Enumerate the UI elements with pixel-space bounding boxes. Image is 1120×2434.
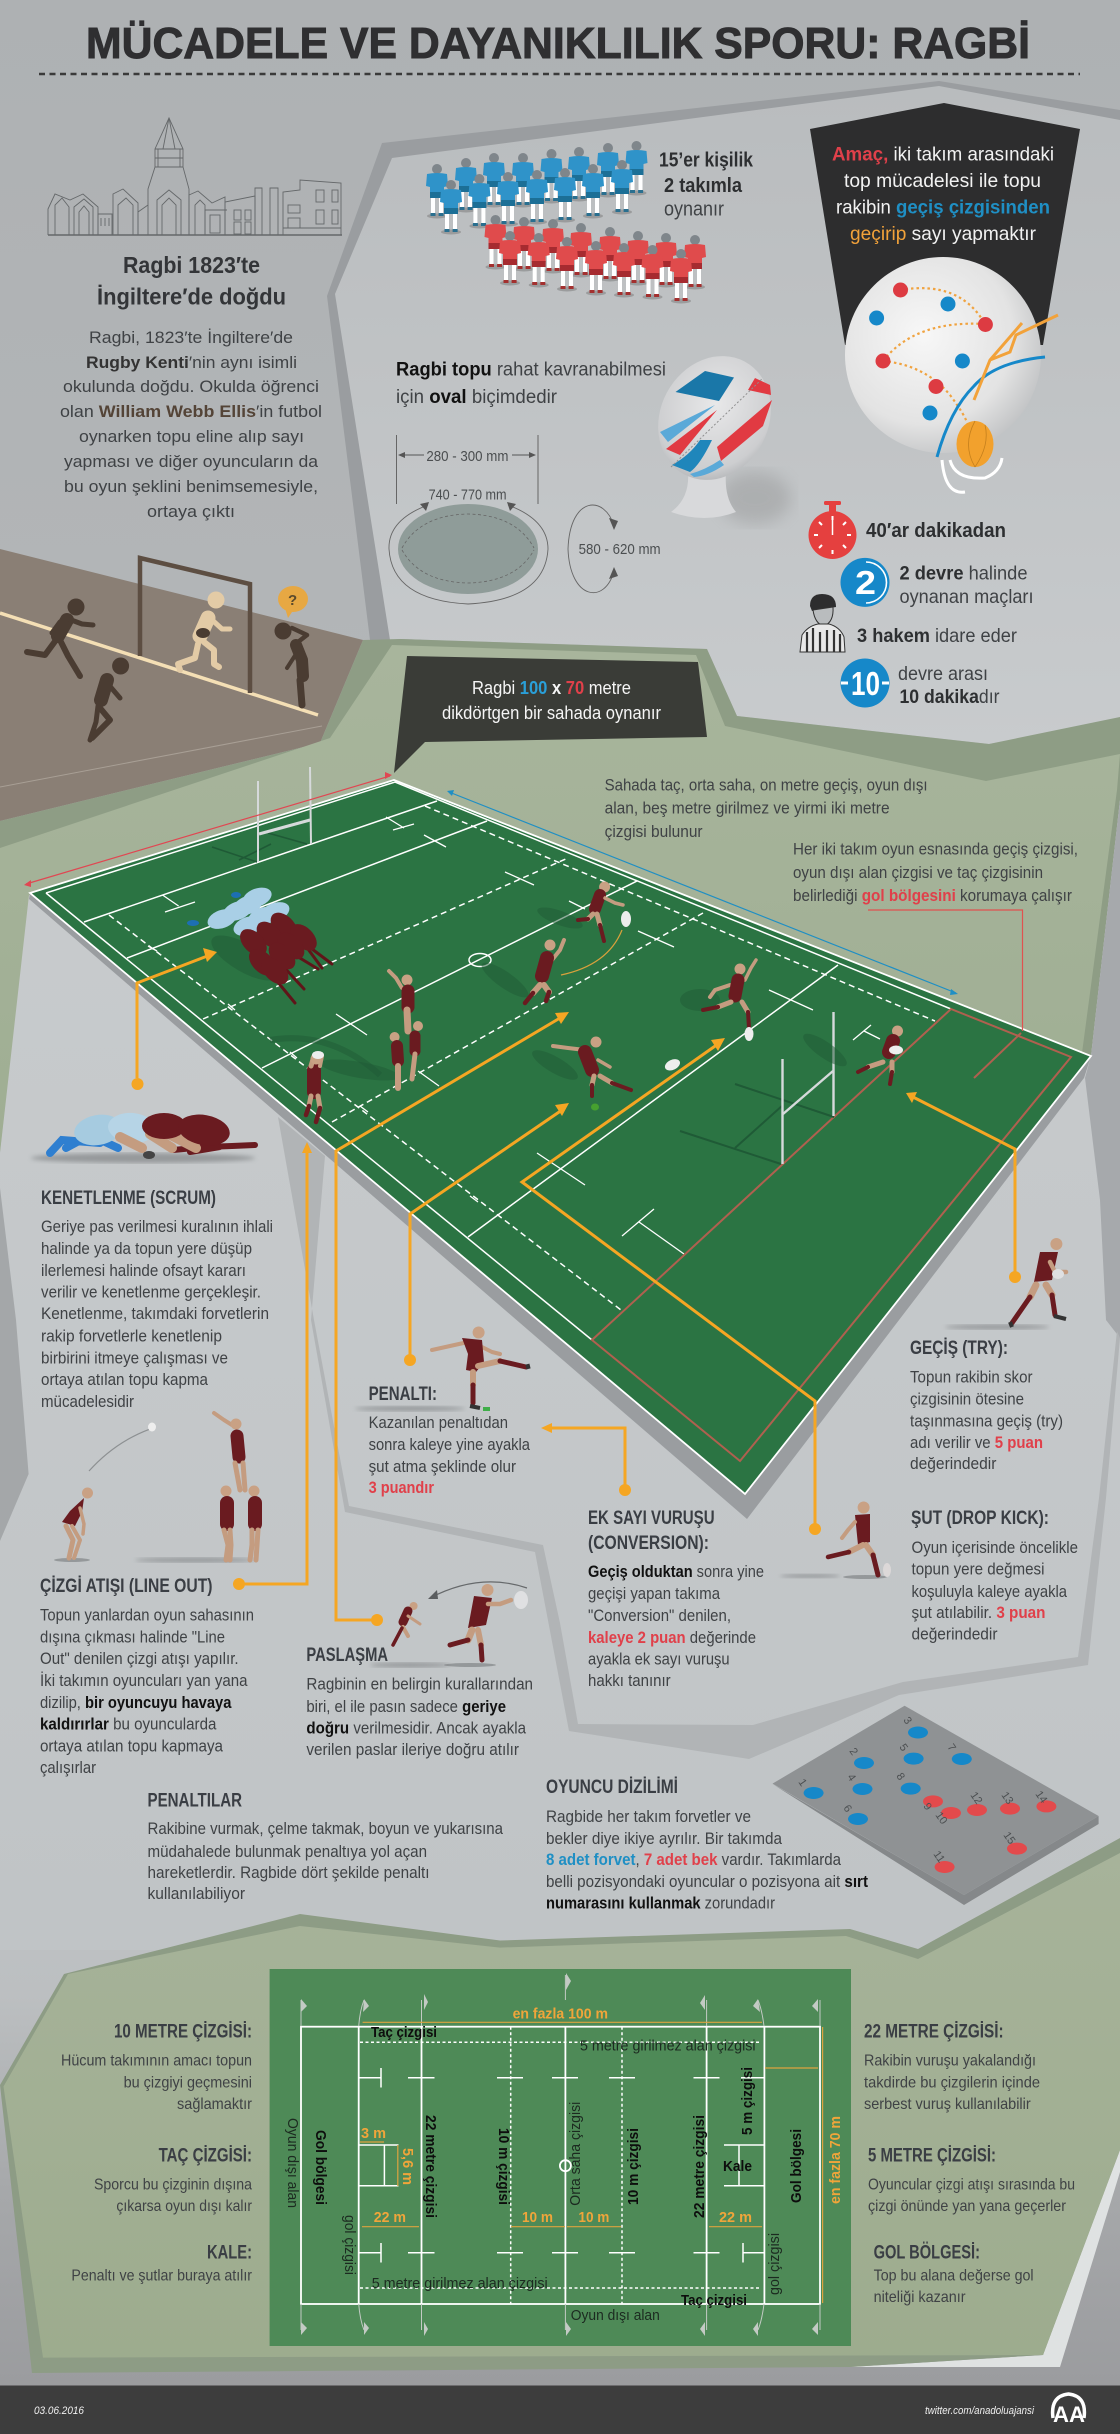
label: 5 metre line: çizgi önünde yan yana geçerler	[868, 2198, 1067, 2215]
panel: lower green pitch guide	[0, 1838, 1120, 2373]
text: pitch lines note: Sahada taç, orta saha, on metre geçiş, oyun dışı	[605, 776, 928, 794]
text: scrum: rakip forvetlerle kenetlenip	[41, 1327, 222, 1345]
text: aim	[832, 144, 1054, 245]
label: 10 metre line: 10 METRE ÇİZGİSİ:	[114, 2022, 252, 2043]
arrow: scrum pointer	[132, 948, 217, 1090]
text: rugby ball description	[396, 360, 666, 408]
panel: brown history ground	[0, 549, 363, 821]
pitch line labels: 5 metre girilmez alan çizgisi	[580, 2038, 756, 2055]
text: line out: kaldırırlar bu oyuncularda	[40, 1716, 217, 1734]
diagram: player formation board: 12	[968, 1790, 984, 1807]
heading: drop kick: ŞUT (DROP KICK):	[911, 1508, 1049, 1529]
pitch line labels: Oyun dışı alan	[284, 2118, 301, 2208]
text: 15 player teams	[659, 150, 754, 220]
text: line out: Out" denilen çizgi atışı yapılır.	[40, 1650, 239, 1668]
pitch orange measurements: 10 m	[578, 2209, 609, 2226]
diagram: top-down pitch	[270, 1969, 851, 2346]
text: passing: doğru verilmesidir. Ancak ayakla	[306, 1720, 527, 1738]
arrow: drop kick pointer	[522, 1038, 821, 1535]
text: goal area note: Her iki takım oyun esnasında geçiş çizgisi,	[793, 841, 1078, 859]
pitch line labels: 22 metre çizgisi	[691, 2115, 708, 2218]
diagram: player formation board: 15	[1001, 1830, 1017, 1847]
text: try: değerindedir	[910, 1455, 997, 1473]
label: 22 metre line: serbest vuruş kullanılabilir	[864, 2096, 1031, 2113]
label: 5 metre line: Oyuncular çizgi atışı sırasında bu	[868, 2176, 1075, 2194]
heading: try: GEÇİŞ (TRY):	[910, 1338, 1008, 1359]
red pointer to goal area	[868, 910, 1022, 1031]
pitch line labels: gol çizgisi	[341, 2215, 358, 2275]
illustration: penalty kicker	[355, 1326, 530, 1411]
text: passing: biri, el ile pasın sadece geriye	[306, 1698, 506, 1716]
diagram: player formation board: 1	[796, 1777, 809, 1789]
icon: running figure one	[27, 598, 93, 676]
diagram: ball dimensions: 280 - 300 mm	[426, 448, 508, 465]
icon: rugby ball on tee	[637, 336, 792, 524]
text: penalties: müdahalede bulunmak penaltıya yol açan	[148, 1843, 427, 1861]
diagram: attack play on ball	[845, 257, 1058, 492]
text: aim: Amaç, iki takım arasındaki	[832, 144, 1054, 166]
text: drop kick: koşuluyla kaleye ayakla	[912, 1583, 1068, 1601]
text: player formation	[546, 1808, 868, 1912]
heading: penalties: PENALTILAR	[148, 1790, 242, 1811]
label: touch line	[94, 2146, 253, 2215]
text: conversion: hakkı tanınır	[588, 1672, 671, 1690]
text: penalty: sonra kaleye yine ayakla	[369, 1436, 531, 1454]
arrow: try pointer	[906, 1092, 1021, 1283]
goal line and dead ball area	[592, 1009, 1071, 1461]
arrow: passing pointer	[336, 1012, 569, 1626]
heading: player formation: OYUNCU DİZİLİMİ	[546, 1777, 678, 1798]
text: penalties	[148, 1820, 504, 1903]
text: conversion: "Conversion" denilen,	[588, 1607, 731, 1625]
icon: confused figure	[274, 622, 307, 705]
text: player formation: numarasını kullanmak zorundadır	[546, 1894, 775, 1912]
icon: running figure two	[90, 658, 129, 740]
text: penalty: şut atma şeklinde olur	[369, 1458, 516, 1476]
diagram: ball dimensions: 580 - 620 mm	[579, 541, 661, 558]
player: place kicker on pitch	[680, 960, 756, 1041]
panel: aim black box	[810, 103, 1080, 345]
text: pitch lines note: alan, beş metre girilmez ve yirmi iki metre	[605, 800, 890, 818]
text: penalties: kullanılabiliyor	[148, 1885, 245, 1903]
pitch orange measurements: en fazla 100 m	[513, 2005, 608, 2022]
diagram: player formation board: 14	[1033, 1789, 1049, 1806]
diagram: player formation board	[772, 1706, 1099, 1905]
label: 22 metre line: Rakibin vuruşu yakalandığı	[864, 2053, 1036, 2070]
history: heading: İngiltere′de doğdu	[97, 284, 286, 310]
heading: penalty: PENALTI:	[369, 1384, 437, 1405]
footer bar	[0, 2386, 1120, 2434]
diagram: player formation board: 6	[841, 1803, 854, 1815]
text: passing: verilen paslar ileriye doğru atılır	[306, 1741, 519, 1759]
label: 10 metre line: Hücum takımının amacı topun	[61, 2053, 252, 2070]
pitch orange measurements: 5,6 m	[399, 2148, 416, 2185]
text: half time: 10 dakikadır	[900, 686, 1000, 708]
text: scrum: halinde ya da topun yere düşüp	[41, 1240, 252, 1258]
pitch line labels: Taç çizgisi	[371, 2024, 437, 2041]
pitch orange measurements: 10 m	[522, 2209, 553, 2226]
team: red 15 players	[484, 215, 706, 304]
pitch line labels	[284, 2024, 805, 2324]
history: body text: yapması ve diğer oyuncuların da	[64, 453, 319, 471]
text: try: adı verilir ve 5 puan	[910, 1434, 1043, 1452]
goal posts far	[212, 767, 311, 862]
text: line out: Topun yanlardan oyun sahasının	[40, 1607, 254, 1625]
panel: green field surround	[0, 639, 1120, 1153]
pitch length arrow	[447, 790, 958, 995]
text: penalties: hareketlerdir. Ragbide dört şekilde penaltı	[148, 1864, 430, 1882]
footer bar: twitter.com/anadoluajansi	[925, 2405, 1034, 2417]
label: 5 metre line: 5 METRE ÇİZGİSİ:	[868, 2146, 996, 2167]
text: line out	[40, 1607, 254, 1777]
label: 22 metre line: takdirde bu çizgilerin içinde	[864, 2075, 1040, 2092]
pitch line labels: 10 m çizgisi	[495, 2128, 512, 2205]
icon: William Webb Ellis figure	[178, 592, 230, 670]
label: 10 metre line	[61, 2022, 253, 2113]
text: drop kick: değerindedir	[912, 1626, 998, 1644]
diagram: ball dimensions	[389, 435, 661, 604]
player: try scorer on pitch	[799, 1026, 903, 1084]
text: player formation: bekler diye ikiye ayrılır. Bir takımda	[546, 1830, 783, 1848]
icon: agency logo: AA	[1053, 2402, 1085, 2427]
label: touch line: Sporcu bu çizginin dışına	[94, 2176, 252, 2194]
text: half time: devre arası	[898, 663, 988, 685]
history: body text: ortaya çıktı	[147, 503, 235, 521]
panel: lower grey rules area	[0, 800, 1120, 1950]
label: goal posts: KALE:	[207, 2243, 252, 2264]
text: scrum: Kenetlenme, takımdaki forvetlerin	[41, 1305, 269, 1323]
text: conversion: Geçiş olduktan sonra yine	[588, 1563, 764, 1581]
text: penalty	[369, 1414, 531, 1497]
text: goal area note	[793, 841, 1078, 905]
history: body text: Ragbi, 1823′te İngiltere′de	[89, 328, 293, 347]
title: MÜCADELE VE DAYANIKLILIK SPORU: RAGBİ	[86, 19, 1030, 68]
text: line out: dışına çıkması halinde "Line	[40, 1628, 225, 1646]
arrow: conversion pointer	[541, 1423, 631, 1496]
label: goal posts	[71, 2243, 253, 2284]
label: touch line: TAÇ ÇİZGİSİ:	[159, 2146, 252, 2167]
illustration: passing	[370, 1582, 528, 1668]
pitch line labels: gol çizgisi	[766, 2233, 783, 2295]
icon: question bubble: ?	[288, 592, 297, 609]
callout: pitch size	[394, 656, 707, 773]
text: two halves	[900, 563, 1034, 608]
text: try: taşınmasına geçiş (try)	[910, 1412, 1063, 1430]
pitch line labels: Gol bölgesi	[312, 2130, 329, 2205]
player: scrum on pitch	[187, 884, 332, 1003]
label: 5 metre line	[868, 2146, 1075, 2215]
illustration: drop kick	[780, 1502, 891, 1579]
player: passer on pitch	[477, 940, 564, 1003]
label: 22 metre line: 22 METRE ÇİZGİSİ:	[864, 2022, 1004, 2043]
illustration: try scorer	[945, 1238, 1066, 1330]
pitch line labels: Gol bölgesi	[788, 2129, 805, 2203]
text: passing: Ragbinin en belirgin kurallarından	[306, 1676, 533, 1694]
text: try	[910, 1368, 1063, 1473]
text: line out: dizilip, bir oyuncuyu havaya	[40, 1694, 232, 1712]
text: drop kick	[912, 1539, 1078, 1644]
pitch line labels: Oyun dışı alan	[571, 2307, 660, 2324]
icon: two halves	[840, 558, 890, 607]
pitch line labels: 5 metre girilmez alan çizgisi	[372, 2275, 548, 2292]
diagram: player formation board: 2	[847, 1746, 860, 1758]
diagram: player formation board: 13	[999, 1790, 1015, 1807]
label: touch line: çıkarsa oyun dışı kalır	[116, 2198, 253, 2215]
text: try: çizgisinin ötesine	[910, 1391, 1024, 1409]
text: aim: top mücadelesi ile topu	[844, 170, 1041, 192]
icon: ten minutes	[840, 658, 890, 708]
text: half time	[898, 663, 1000, 708]
callout: pitch size: dikdörtgen bir sahada oynanır	[442, 702, 661, 723]
illustration: line out	[54, 1413, 260, 1562]
text: line out: İki takımın oyuncuları yan yana	[40, 1671, 248, 1690]
diagram: ball dimensions: 740 - 770 mm	[429, 487, 507, 504]
text: conversion: geçişi yapan takıma	[588, 1585, 721, 1603]
text: scrum: verilir ve kenetlenme gerçekleşir.	[41, 1284, 261, 1302]
panel: upper right	[327, 81, 1120, 744]
history: body text: olan William Webb Ellis ′in futbol	[60, 403, 322, 421]
text: 40 minutes: 40′ar dakikadan	[866, 520, 1006, 542]
icon: question bubble	[278, 586, 308, 618]
icon: referee	[800, 594, 845, 652]
diagram: player formation board: 11	[931, 1849, 947, 1865]
text: drop kick: Oyun içerisinde öncelikle	[912, 1539, 1078, 1557]
diagram: player formation board: 9	[921, 1801, 934, 1813]
label: 10 metre line: sağlamaktır	[177, 2096, 253, 2113]
label: goal zone: niteliği kazanır	[874, 2289, 966, 2306]
heading: conversion: (CONVERSION):	[588, 1533, 709, 1554]
pitch orange measurements: 22 m	[374, 2209, 406, 2226]
player: lineout thrower	[306, 1051, 401, 1122]
text: scrum: ortaya atılan topu kapma	[41, 1371, 209, 1389]
text: penalties: Rakibine vurmak, çelme takmak, boyun ve yukarısına	[148, 1820, 504, 1838]
heading: passing: PASLAŞMA	[306, 1645, 388, 1666]
diagram: player formation board: 7	[945, 1742, 958, 1754]
pitch line labels: 5 m çizgisi	[739, 2067, 756, 2135]
label: goal zone: Top bu alana değerse gol	[874, 2267, 1034, 2284]
text: penalty: Kazanılan penaltıdan	[369, 1414, 508, 1432]
text: drop kick: şut atılabilir. 3 puan	[912, 1604, 1046, 1622]
pitch line labels: Orta saha çizgisi	[567, 2102, 584, 2206]
text: scrum: mücadelesidir	[41, 1393, 134, 1411]
arrow: penalty pointer	[404, 1103, 569, 1366]
player: passer top with ball	[535, 882, 631, 975]
diagram: player formation board: 4	[845, 1772, 858, 1784]
goal posts near	[680, 1012, 834, 1164]
diagram: player formation board: 3	[901, 1715, 914, 1727]
text: three referees: 3 hakem idare eder	[857, 625, 1017, 647]
text: conversion: ayakla ek sayı vuruşu	[588, 1651, 730, 1669]
history: building line art	[48, 118, 342, 235]
footer bar: 03.06.2016	[34, 2405, 85, 2417]
text: line out: ortaya atılan topu kapmaya	[40, 1737, 224, 1755]
pitch orange measurements: en fazla 70 m	[827, 2116, 844, 2204]
rugby pitch in perspective	[24, 767, 1091, 1519]
pitch line labels: 22 metre çizgisi	[422, 2115, 439, 2218]
history: body text: oynarken topu eline alıp sayı	[79, 428, 304, 446]
text: two halves: 2 devre halinde	[900, 563, 1028, 585]
player: drop kicker on pitch	[528, 1036, 682, 1110]
text: 15 player teams: 15’er kişilik	[659, 150, 754, 172]
history: body text: okulunda doğdu. Okulda öğrenci	[63, 378, 319, 396]
heading: conversion: EK SAYI VURUŞU	[588, 1508, 715, 1529]
icon: stopwatch	[808, 501, 856, 559]
text: penalty: 3 puandır	[369, 1479, 435, 1497]
team: blue 15 players	[426, 141, 648, 234]
label: 22 metre line	[864, 2022, 1040, 2113]
history: body text: Rugby Kenti ′nin aynı isimli	[86, 354, 297, 372]
text: rugby ball description: Ragbi topu rahat kavranabilmesi	[396, 360, 666, 380]
text: 15 player teams: oynanır	[664, 198, 724, 220]
history: heading	[97, 252, 286, 310]
pitch line labels: 10 m çizgisi	[625, 2128, 642, 2205]
pitch line labels: Taç çizgisi	[681, 2292, 747, 2309]
label: goal posts: Penaltı ve şutlar buraya atılır	[71, 2267, 253, 2284]
text: scrum: birbirini itmeye çalışması ve	[41, 1350, 228, 1368]
text: scrum	[41, 1218, 273, 1411]
heading: conversion	[588, 1508, 715, 1554]
text: aim: geçirip sayı yapmaktır	[850, 223, 1036, 245]
text: scrum: Geriye pas verilmesi kuralının ihlali	[41, 1218, 273, 1236]
text: try: Topun rakibin skor	[910, 1368, 1033, 1386]
text: goal area note: belirlediği gol bölgesini korumaya çalışır	[793, 887, 1072, 905]
diagram: player formation board: 5	[897, 1742, 910, 1754]
history: body text	[60, 328, 322, 521]
callout: pitch size: Ragbi 100 x 70 metre	[472, 677, 631, 698]
text: aim: rakibin geçiş çizgisinden	[836, 196, 1050, 218]
player: lineout lift	[270, 971, 423, 1088]
heading: line out: ÇİZGİ ATIŞI (LINE OUT)	[40, 1576, 212, 1597]
pitch orange measurements: 22 m	[719, 2209, 752, 2226]
diagram: player formation board: 10	[933, 1810, 949, 1827]
history: heading: Ragbi 1823′te	[123, 252, 260, 278]
text: player formation: Ragbide her takım forvetler ve	[546, 1808, 751, 1826]
text: conversion	[588, 1563, 764, 1690]
pitch orange measurements: 3 m	[361, 2125, 386, 2142]
text: drop kick: topun yere değmesi	[912, 1561, 1044, 1579]
pitch line labels: Kale	[723, 2158, 752, 2175]
text: scrum: ilerlemesi halinde ofsayt kararı	[41, 1262, 246, 1280]
illustration: scrum	[31, 1111, 255, 1163]
diagram: player formation board: 8	[894, 1771, 907, 1783]
label: goal zone: GOL BÖLGESİ:	[874, 2243, 980, 2264]
arrow: line out pointer	[233, 1142, 312, 1590]
text: 15 player teams: 2 takımla	[664, 175, 743, 197]
text: line out: çalışırlar	[40, 1759, 96, 1777]
icon: two halves: 2	[855, 564, 876, 601]
facts: timing and officials	[800, 501, 1034, 708]
pitch orange measurements	[361, 2005, 844, 2226]
text: player formation: belli pozisyondaki oyuncular o pozisyona ait sırt	[546, 1873, 868, 1891]
text: player formation: 8 adet forvet, 7 adet bek vardır. Takımlarda	[546, 1851, 842, 1869]
heading: scrum: KENETLENME (SCRUM)	[41, 1188, 216, 1209]
history: goal and figures illustration	[0, 558, 318, 740]
label: goal zone	[874, 2243, 1034, 2306]
text: passing	[306, 1676, 533, 1759]
text: rugby ball description: için oval biçimdedir	[396, 387, 558, 408]
text: pitch lines note: çizgisi bulunur	[605, 823, 703, 841]
text: pitch lines note	[605, 776, 928, 841]
text: conversion: kaleye 2 puan değerinde	[588, 1629, 756, 1647]
history: body text: bu oyun şeklini benimsemesiyle,	[64, 478, 318, 496]
text: two halves: oynanan maçları	[900, 586, 1034, 608]
label: 10 metre line: bu çizgiyi geçmesini	[124, 2075, 252, 2092]
pitch width arrow	[24, 772, 392, 887]
icon: ten minutes: 10	[851, 665, 880, 702]
text: goal area note: oyun dışı alan çizgisi ve taç çizgisinin	[793, 864, 1043, 882]
